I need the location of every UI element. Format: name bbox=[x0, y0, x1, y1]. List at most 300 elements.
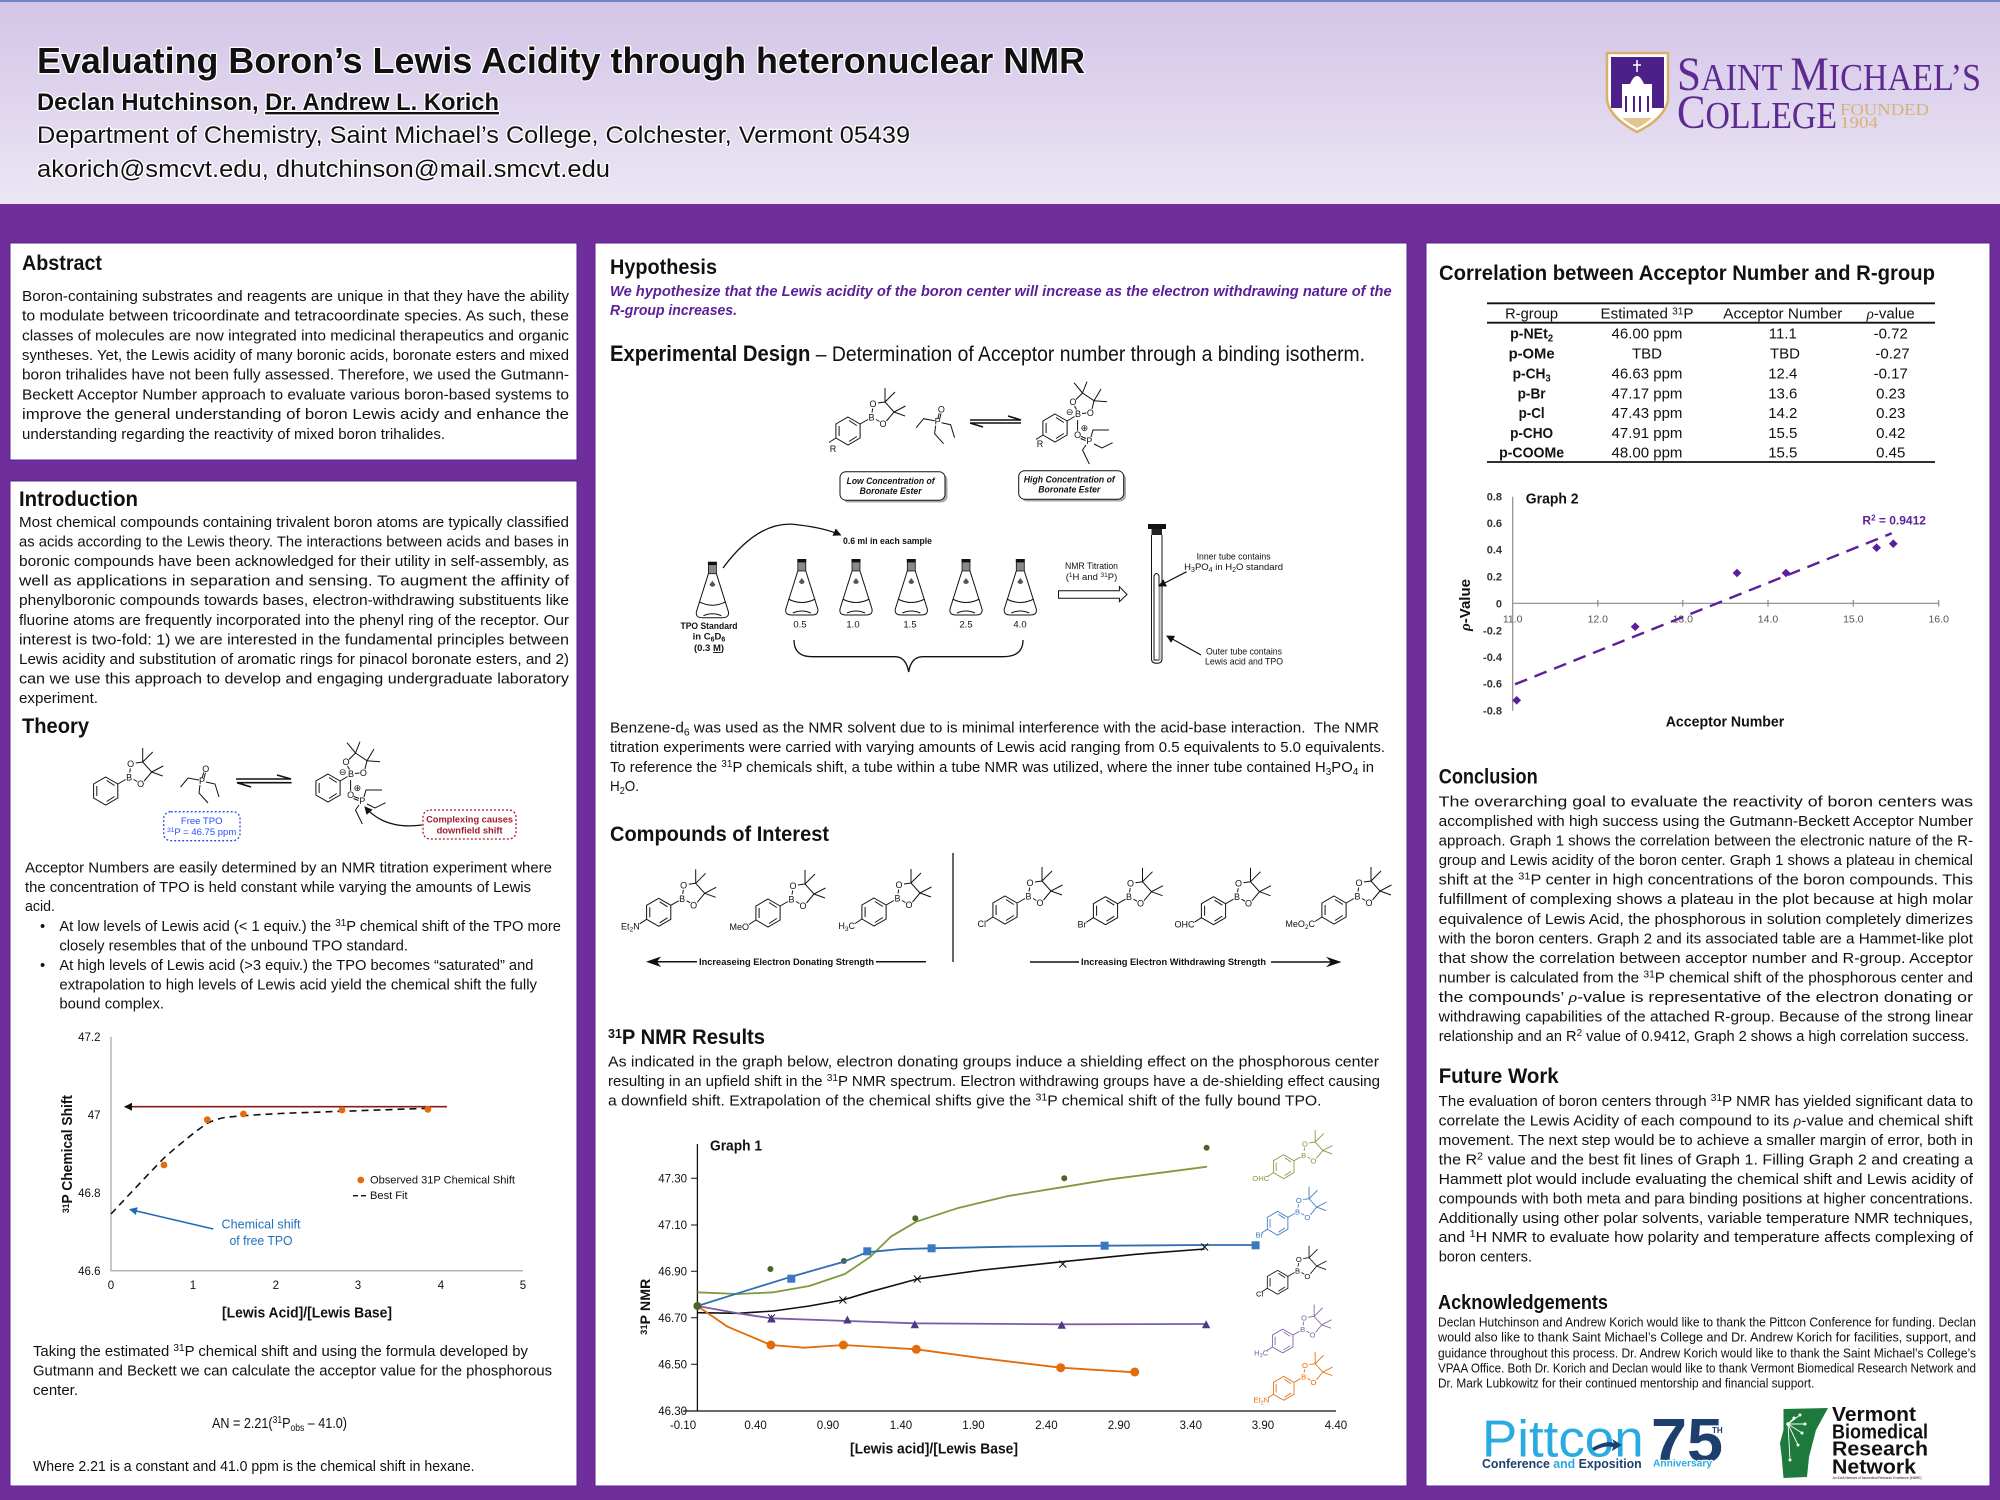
table: acceptor numbers: 47.43 ppm bbox=[1612, 405, 1682, 422]
molecule: complex bbox=[316, 742, 386, 824]
molecule: complex bbox=[1036, 382, 1113, 464]
table: acceptor numbers: 46.63 ppm bbox=[1612, 365, 1682, 382]
introduction text: experiment. bbox=[19, 691, 98, 707]
table: acceptor numbers: Estimated bbox=[1600, 305, 1667, 322]
table: acceptor numbers: 13.6 bbox=[1768, 385, 1797, 402]
data points bbox=[161, 1106, 431, 1168]
panel: abstract bbox=[10, 243, 577, 460]
conclusion text: withdrawing capabilities of the attached R-group. Because of the strong linear bbox=[1438, 1010, 1973, 1026]
molecule: TPO: P bbox=[199, 776, 205, 786]
scheme: binding equilibrium bbox=[829, 382, 1126, 502]
formula: AN = 2.21( bbox=[212, 1416, 283, 1432]
label: outer tube: Lewis acid and TPO bbox=[1205, 657, 1283, 668]
logo: Pittcon: Anniversary bbox=[1653, 1458, 1712, 1470]
series: Cl bbox=[697, 1244, 1208, 1321]
label: inner tube: H bbox=[1184, 562, 1191, 573]
hypothesis statement: R-group increases. bbox=[610, 303, 737, 319]
table: acceptor numbers: 47.17 ppm bbox=[1612, 385, 1682, 402]
compound: OMe: O bbox=[799, 901, 807, 911]
heading: theory: Theory bbox=[22, 715, 89, 738]
label: TPO standard: 6 bbox=[721, 636, 725, 643]
molecule: TPO: O bbox=[202, 764, 209, 774]
text: solvent and method: 6 bbox=[684, 728, 690, 738]
compound: Br: B bbox=[1126, 892, 1132, 902]
table: acceptor numbers: 0.42 bbox=[1876, 425, 1905, 442]
table: acceptor numbers: 14.2 bbox=[1768, 405, 1797, 422]
conclusion text: number is calculated from the bbox=[1439, 970, 1633, 986]
callout: free TPO: Free TPO bbox=[181, 816, 222, 827]
introduction text: fluorine atoms are frequently incorporated into the phenyl ring of the receptor. Our bbox=[19, 613, 569, 629]
x axis ticks: 1.90 bbox=[962, 1420, 985, 1432]
text: results: 31 bbox=[827, 1073, 838, 1084]
future work text: Additionally using other polar solvents, variable temperature NMR techniques, bbox=[1439, 1211, 1973, 1227]
label: NMR titration: 31 bbox=[1101, 572, 1108, 579]
future work text: 2 bbox=[1477, 1151, 1484, 1162]
text: formula explanation: 31 bbox=[173, 1343, 185, 1354]
future work text: boron centers. bbox=[1439, 1250, 1532, 1266]
axis label: x: [Lewis acid]/[Lewis Base] bbox=[850, 1440, 1018, 1457]
y axis ticks: 47.10 bbox=[658, 1220, 687, 1232]
table: acceptor numbers: TBD bbox=[1632, 345, 1662, 362]
text: solvent and method: P chemicals shift, a tube within a tube NMR was utilized, where the inner tube contained H bbox=[732, 760, 1326, 776]
theory text: 31 bbox=[335, 918, 347, 929]
label: low concentration: Boronate Ester bbox=[860, 486, 923, 497]
compound: Br: O bbox=[1127, 879, 1134, 889]
data points bbox=[1512, 539, 1898, 705]
logo: Vermont Biomedical Research Network: An IDeA Network of Biomedical Research Excellence (INBRE) bbox=[1833, 1476, 1922, 1480]
y axis ticks: -0.4 bbox=[1483, 652, 1503, 664]
compound: CO2Me: O bbox=[1355, 878, 1363, 888]
future work text: 31 bbox=[1711, 1093, 1723, 1104]
label: high concentration bbox=[1019, 471, 1126, 502]
molecule: complex: ⊕ bbox=[1081, 423, 1088, 433]
table: acceptor numbers: p-Cl bbox=[1519, 405, 1545, 422]
callout: free TPO bbox=[164, 812, 240, 841]
future work text: value and the best fit lines of Graph 1. Filling Graph 2 and creating a bbox=[1483, 1152, 1974, 1168]
conclusion text: The overarching goal to evaluate the reactivity of boron centers was bbox=[1439, 794, 1973, 810]
table: acceptor numbers: 47.91 ppm bbox=[1612, 425, 1682, 442]
text: solvent and method: 2 bbox=[620, 786, 625, 797]
compound: CO2Me: B bbox=[1354, 892, 1361, 902]
title: Evaluating Boron’s Lewis Acidity through heteronuclear NMR bbox=[37, 40, 1085, 81]
y axis ticks: 0.2 bbox=[1487, 572, 1502, 584]
table: acceptor numbers: ρ-value bbox=[1866, 305, 1915, 322]
logo: Vermont Biomedical Research Network: Research bbox=[1832, 1439, 1928, 1461]
y axis ticks: 46.90 bbox=[658, 1266, 687, 1278]
logo: Pittcon bbox=[1482, 1407, 1723, 1476]
table: acceptor numbers: 3 bbox=[1545, 373, 1551, 384]
labels: equivalents: 1.0 bbox=[846, 619, 860, 630]
text: solvent and method: O. bbox=[625, 779, 639, 795]
x axis ticks: 11.0 bbox=[1503, 613, 1523, 625]
compound: Et2N: O bbox=[680, 880, 687, 890]
molecule: TPO bbox=[916, 405, 955, 444]
series: Br bbox=[697, 1241, 1260, 1306]
logo: Saint Michael's College: FOUNDED bbox=[1840, 100, 1929, 119]
abstract text: to modulate between tricoordinate and tetracoordinate species. As such, these bbox=[22, 309, 569, 325]
compound: CH3: H bbox=[838, 921, 845, 931]
abstract text: improve the general understanding of boron Lewis acidy and enhance the bbox=[22, 407, 569, 423]
conclusion text: P chemical shift of the phosphorous center and bbox=[1655, 970, 1973, 986]
theory scheme: equilibrium bbox=[94, 742, 516, 841]
y axis ticks: 0.8 bbox=[1487, 491, 1502, 503]
series: CH3 bbox=[697, 1306, 1210, 1329]
molecule key: Et2N: O bbox=[1310, 1378, 1316, 1387]
text: solvent and method: was used as the NMR solvent due to is minimal interference with the acid-base interaction. The NMR bbox=[690, 720, 1379, 736]
table: acceptor numbers: 31 bbox=[1672, 306, 1684, 317]
logo: Saint Michael's College: 1904 bbox=[1840, 113, 1879, 132]
abstract text: Beckett Acceptor Number approach to evaluate various boron-based systems to bbox=[22, 387, 569, 403]
chart: 31P chemical shift titration: 2 bbox=[273, 1280, 279, 1292]
compounds of interest row bbox=[621, 853, 1392, 968]
compound: Cl: O bbox=[1036, 898, 1044, 908]
formula: obs bbox=[291, 1423, 304, 1434]
molecule: complex: ⊖ bbox=[339, 767, 346, 777]
labels: equivalents: 2.5 bbox=[959, 619, 973, 630]
acknowledgements text: Declan Hutchinson and Andrew Korich would like to thank the Pittcon Conference for funding. Declan bbox=[1438, 1316, 1976, 1330]
introduction text: boronic compounds have been acknowledged for their utility in self-assembly, as bbox=[19, 554, 569, 570]
future work text: P NMR has yielded significant data to bbox=[1722, 1094, 1973, 1110]
label: high concentration: Boronate Ester bbox=[1038, 485, 1101, 496]
molecule key: H3C: O bbox=[1301, 1314, 1307, 1323]
theory text: At high levels of Lewis acid (>3 equiv.) the TPO becomes “saturated” and bbox=[59, 958, 533, 974]
labels: equivalents bbox=[793, 619, 1027, 630]
r squared label: = 0.9412 bbox=[1876, 513, 1926, 527]
label: NMR titration: 1 bbox=[1069, 572, 1073, 579]
brace bbox=[794, 640, 1023, 672]
label: inner tube: 3 bbox=[1191, 567, 1195, 574]
arrow: transfer bbox=[723, 524, 840, 568]
heading: future work: Future Work bbox=[1439, 1065, 1559, 1088]
molecule: phenyl boronate: B bbox=[126, 772, 132, 782]
conclusion text: that show the correlation between acceptor number and R-group. Acceptor bbox=[1439, 951, 1973, 967]
label: low concentration: Low Concentration of bbox=[847, 476, 935, 487]
y axis ticks: 46.70 bbox=[658, 1313, 687, 1325]
conclusion text: fulfillment of complexing shows a plateau in the plot because at high molar bbox=[1439, 892, 1973, 908]
axis label: x: Acceptor Number bbox=[1666, 714, 1784, 731]
trendline bbox=[1515, 533, 1892, 684]
series: Et2N bbox=[697, 1306, 1139, 1376]
conclusion text: with the boron centers. Graph 2 and its associated table are a Hammet-like plot bbox=[1438, 931, 1973, 947]
molecule key: Et2N: B bbox=[1301, 1372, 1306, 1381]
future work text bbox=[1439, 1093, 1974, 1266]
compound: CHO: O bbox=[1245, 899, 1252, 909]
future work text: compounds with both meta and para binding positions at higher concentrations. bbox=[1439, 1191, 1973, 1207]
x axis ticks: 1.40 bbox=[890, 1420, 912, 1432]
molecule: complex: O bbox=[1087, 408, 1094, 418]
table: acceptor numbers: p-CHO bbox=[1510, 425, 1553, 442]
theory text: At low levels of Lewis acid (< 1 equiv.) the bbox=[59, 919, 333, 935]
arrow: donating strength: Increaseing Electron Donating Strength bbox=[699, 957, 874, 968]
heading: 31P NMR results: 31 bbox=[608, 1026, 622, 1041]
logo: Saint Michael's College bbox=[1607, 48, 1981, 139]
chart: graph 1 bbox=[637, 1130, 1347, 1457]
label: NMR titration bbox=[1065, 561, 1118, 583]
x axis ticks bbox=[1503, 613, 1949, 625]
introduction text: can we use this approach to develop and engaging undergraduate laboratory bbox=[19, 672, 570, 688]
x axis ticks: 0.90 bbox=[817, 1420, 839, 1432]
table: acceptor numbers: P bbox=[1683, 305, 1694, 322]
conclusion text: P center in high concentrations of the boron compounds. This bbox=[1531, 873, 1973, 889]
molecule: phenyl boronate: O bbox=[137, 779, 144, 789]
conclusion text: shift at the bbox=[1439, 873, 1507, 889]
text: results: P NMR spectrum. Electron withdrawing groups have a de-shielding effect causing bbox=[838, 1074, 1380, 1090]
x axis ticks bbox=[670, 1420, 1347, 1432]
introduction text: well as applications in separation and sensing. To augment the affinity of bbox=[18, 574, 570, 590]
panel: hypothesis, design, results bbox=[595, 243, 1407, 1486]
x axis ticks: 14.0 bbox=[1758, 613, 1778, 625]
future work text: Hammett plot would include evaluating the chemical shift and Lewis acidity of bbox=[1439, 1172, 1974, 1188]
conclusion text: group and Lewis acidity of the boron center. Graph 1 shows a plateau in chemical bbox=[1439, 853, 1973, 869]
theory text: closely resembles that of the unbound TPO standard. bbox=[59, 939, 408, 955]
x axis ticks: 3.40 bbox=[1180, 1420, 1202, 1432]
y axis ticks: -0.8 bbox=[1483, 705, 1502, 717]
axis label: y: P NMR bbox=[637, 1279, 653, 1324]
authors: Declan Hutchinson, Dr. Andrew L. Korich bbox=[37, 89, 499, 116]
logo: Pittcon: Pittcon bbox=[1482, 1411, 1644, 1469]
x axis ticks: 2.40 bbox=[1035, 1420, 1058, 1432]
molecule: boronate ester bbox=[829, 388, 906, 454]
introduction text: Most chemical compounds containing trivalent boron atoms are typically classified bbox=[19, 515, 569, 531]
future work text: and bbox=[1439, 1230, 1463, 1246]
compound: Cl: B bbox=[1025, 892, 1032, 902]
future work text: 1 bbox=[1470, 1229, 1476, 1240]
compound: CO2Me: O bbox=[1365, 898, 1373, 908]
abstract text: understanding regarding the reactivity of mixed boron trihalides. bbox=[22, 427, 445, 443]
chart: 31P chemical shift titration: 4 bbox=[438, 1280, 445, 1292]
y axis ticks: 0 bbox=[1496, 598, 1502, 610]
logo: Saint Michael's College: SAINT MICHAEL’S bbox=[1677, 48, 1981, 101]
molecule key: Cl: B bbox=[1295, 1266, 1300, 1275]
molecule: complex: ⊕ bbox=[354, 783, 361, 793]
text: results bbox=[608, 1055, 1380, 1110]
table: acceptor numbers: 0.23 bbox=[1876, 405, 1905, 422]
chart: 31P chemical shift titration: 47.2 bbox=[78, 1032, 100, 1044]
molecule key: Br: O bbox=[1296, 1196, 1302, 1205]
compound: CH3: O bbox=[895, 880, 903, 890]
annotation: free TPO: of free TPO bbox=[230, 1233, 292, 1248]
theory text: bound complex. bbox=[59, 997, 164, 1013]
text: results: 31 bbox=[1035, 1093, 1048, 1104]
molecule: complex: O bbox=[1069, 397, 1077, 407]
molecule key: CHO: OHC bbox=[1252, 1174, 1270, 1183]
molecule: TPO: P bbox=[935, 417, 941, 427]
theory text: extrapolation to high levels of Lewis acid yield the chemical shift the fully bbox=[59, 977, 538, 993]
compound: Et2N: N bbox=[633, 921, 640, 931]
label: TPO standard: 6 bbox=[711, 636, 715, 643]
legend: Observed 31P Chemical Shift bbox=[370, 1175, 515, 1187]
hypothesis statement: We hypothesize that the Lewis acidity of the boron center will increase as the electron withdrawing nature of the bbox=[610, 284, 1392, 300]
y axis ticks: 47.30 bbox=[658, 1174, 687, 1186]
molecule: boronate ester: O bbox=[879, 419, 887, 429]
heading: compounds of interest: Compounds of Interest bbox=[610, 823, 829, 846]
molecule key: H3C bbox=[1254, 1304, 1332, 1359]
chart: 31P chemical shift titration bbox=[60, 1032, 526, 1322]
label: inner tube: PO bbox=[1195, 562, 1209, 573]
compound: Et2N: B bbox=[679, 894, 685, 904]
text: results: P chemical shift of the fully bound TPO. bbox=[1047, 1094, 1322, 1110]
series: CHO bbox=[697, 1145, 1210, 1294]
acknowledgements text: would also like to thank Saint Michael’s College and Dr. Andrew Korich for facilities, support, and bbox=[1437, 1331, 1976, 1345]
molecule: complex: B bbox=[348, 769, 354, 779]
formula: – 41.0) bbox=[304, 1416, 347, 1432]
label: inner tube: 4 bbox=[1209, 567, 1213, 574]
molecule: boronate ester: R bbox=[830, 444, 837, 454]
abstract text: classes of molecules are now integrated into medicinal therapeutics and organic bbox=[22, 328, 570, 344]
compound: Et2N: 2 bbox=[630, 926, 634, 933]
conclusion text: 2 bbox=[1577, 1028, 1583, 1039]
table: acceptor numbers: 0.23 bbox=[1876, 385, 1905, 402]
compound: CHO: OHC bbox=[1174, 920, 1195, 930]
label: NMR titration: ( bbox=[1066, 572, 1069, 583]
compound: CHO: B bbox=[1234, 892, 1240, 902]
compound: CH3: C bbox=[848, 921, 856, 931]
abstract text: syntheses. Yet, the Lewis acidity of many boronic acids, boronate esters and mixed bbox=[22, 348, 569, 364]
chart: 31P chemical shift titration: 3 bbox=[355, 1280, 361, 1292]
conclusion text: value of 0.9412, Graph 2 shows a high correlation success. bbox=[1582, 1029, 1969, 1045]
axis label: x: [Lewis Acid]/[Lewis Base] bbox=[222, 1305, 392, 1322]
acknowledgements text bbox=[1437, 1316, 1976, 1391]
molecule key: CHO: O bbox=[1302, 1139, 1308, 1148]
theory text: • bbox=[40, 919, 45, 935]
table: acceptor numbers: -0.72 bbox=[1874, 325, 1908, 342]
molecule key: Br: Br bbox=[1256, 1231, 1264, 1240]
label: TPO standard: D bbox=[715, 631, 722, 642]
table: acceptor numbers: 0.45 bbox=[1876, 445, 1905, 462]
text: hexane note: Where 2.21 is a constant and 41.0 ppm is the chemical shift in hexane. bbox=[33, 1459, 474, 1475]
labels: equivalents: 1.5 bbox=[903, 619, 917, 630]
future work text: The evaluation of boron centers through bbox=[1439, 1094, 1701, 1110]
conclusion text: 31 bbox=[1518, 872, 1531, 883]
formula: 31 bbox=[273, 1415, 282, 1426]
x axis ticks: 13.0 bbox=[1673, 613, 1693, 625]
future work text: H NMR to evaluate how polarity and temperature affects complexing of bbox=[1476, 1230, 1974, 1246]
start point bbox=[693, 1302, 701, 1310]
logo: Pittcon: 75 bbox=[1651, 1407, 1723, 1476]
molecule key: H3C: 3 bbox=[1260, 1353, 1263, 1359]
heading: 31P NMR results: P NMR Results bbox=[622, 1026, 765, 1049]
callout: free TPO: 31 bbox=[167, 827, 175, 834]
abstract text: boron trihalides have not been fully assessed. Therefore, we used the Gutmann- bbox=[22, 368, 569, 384]
heading: acknowledgements: Acknowledgements bbox=[1438, 1292, 1608, 1314]
compound: CO2Me: C bbox=[1308, 919, 1316, 929]
y axis ticks: -0.2 bbox=[1483, 625, 1502, 637]
heading: hypothesis: Hypothesis bbox=[610, 256, 717, 279]
conclusion text: approach. Graph 1 shows the correlation between the electronic nature of the R- bbox=[1439, 834, 1973, 850]
compound: Br: Br bbox=[1078, 920, 1087, 930]
molecule key: Br: B bbox=[1295, 1207, 1300, 1216]
arrow: withdrawing strength: Increasing Electron Withdrawing Strength bbox=[1081, 957, 1266, 968]
heading: conclusion: Conclusion bbox=[1439, 766, 1538, 788]
chart: 31P chemical shift titration: 46.6 bbox=[78, 1266, 100, 1278]
header banner bbox=[0, 0, 2000, 204]
label: inner tube: in H bbox=[1213, 562, 1232, 573]
text: results: a downfield shift. Extrapolation of the chemical shifts give the bbox=[608, 1094, 1007, 1110]
table: acceptor numbers: 15.5 bbox=[1768, 445, 1797, 462]
y axis ticks: 0.4 bbox=[1487, 545, 1503, 557]
acknowledgements text: guidance throughout this process. Dr. Andrew Korich would like to thank the Saint Michael’s College’s bbox=[1438, 1346, 1976, 1360]
table: acceptor numbers: p-COOMe bbox=[1499, 445, 1564, 462]
label: low concentration bbox=[840, 472, 948, 502]
theory text: Acceptor Numbers are easily determined by an NMR titration experiment where bbox=[25, 860, 552, 876]
compound: CH3 bbox=[838, 869, 932, 933]
heading: experimental design: Experimental Design – Determination of Acceptor number through a binding isotherm. bbox=[610, 341, 1365, 366]
compound: CHO: O bbox=[1235, 879, 1242, 889]
text: formula explanation: center. bbox=[33, 1383, 78, 1399]
compound: CH3: B bbox=[894, 894, 901, 904]
panel: correlation, conclusion, future work, acknowledgements bbox=[1426, 243, 1990, 1486]
theory text: the concentration of TPO is held constant while varying the amounts of Lewis bbox=[25, 880, 531, 896]
molecule: complex: B bbox=[1075, 409, 1081, 419]
conclusion text: equivalence of Lewis Acid, the phosphorous in solution completely dimerizes bbox=[1439, 912, 1973, 928]
chart: 31P chemical shift titration: 5 bbox=[520, 1280, 526, 1292]
x axis ticks: 4.40 bbox=[1325, 1420, 1347, 1432]
label: outer tube bbox=[1205, 646, 1283, 668]
annotation: free TPO bbox=[222, 1216, 301, 1248]
molecule key: CHO: O bbox=[1310, 1156, 1316, 1165]
label: high concentration: High Concentration of bbox=[1024, 475, 1116, 486]
label: NMR titration: P) bbox=[1108, 572, 1117, 583]
compound: Cl bbox=[978, 867, 1062, 929]
table: acceptor numbers: 48.00 ppm bbox=[1612, 445, 1682, 462]
future work text: the R bbox=[1439, 1152, 1474, 1168]
text: solvent and method: To reference the bbox=[610, 760, 717, 776]
compound: CH3: O bbox=[905, 900, 913, 910]
table: acceptor numbers: 2 bbox=[1548, 333, 1554, 344]
text: solvent and method: in bbox=[1358, 760, 1374, 776]
molecule key: Cl: O bbox=[1304, 1272, 1310, 1281]
text: results: As indicated in the graph below, electron donating groups induce a shielding effect on the phosphorous center bbox=[608, 1055, 1379, 1071]
compound: CO2Me: MeO bbox=[1285, 919, 1305, 929]
label: volume: 0.6 ml in each sample bbox=[843, 536, 932, 547]
molecule: TPO: O bbox=[938, 405, 945, 415]
y axis ticks: 0.6 bbox=[1487, 518, 1502, 530]
molecule: complex: P bbox=[359, 796, 365, 806]
label: inner tube: 2 bbox=[1232, 567, 1236, 574]
molecule: boronate ester: O bbox=[869, 399, 877, 409]
table: acceptor numbers: p-Br bbox=[1518, 385, 1546, 402]
label: TPO standard bbox=[680, 621, 738, 654]
molecule key: Br bbox=[1256, 1187, 1326, 1240]
text: solvent and method: titration experiments were carried with varying amounts of Lewis acid ranging from 0.5 equivalents to 5.0 equivalents. bbox=[610, 740, 1385, 756]
table: acceptor numbers: 11.1 bbox=[1769, 325, 1797, 342]
compound: OMe bbox=[729, 870, 826, 932]
molecule: boronate ester: B bbox=[868, 412, 875, 422]
conclusion text: accomplished with high success using the Gutmann-Beckett Acceptor Number bbox=[1439, 814, 1973, 830]
y axis ticks bbox=[1483, 491, 1503, 717]
molecule: complex: R bbox=[1037, 439, 1044, 449]
molecule key: Et2N bbox=[1253, 1352, 1333, 1406]
y axis ticks: 46.50 bbox=[658, 1360, 687, 1372]
molecule key: H3C: O bbox=[1309, 1331, 1315, 1340]
saturation arrow bbox=[125, 1106, 447, 1108]
text: formula explanation bbox=[33, 1343, 552, 1399]
chart: 31P chemical shift titration: 46.8 bbox=[78, 1188, 100, 1200]
callout: complexing: Complexing causes bbox=[426, 815, 513, 826]
molecule key: Et2N: O bbox=[1302, 1361, 1308, 1370]
text: solvent and method: Benzene-d bbox=[610, 720, 682, 736]
abstract text: Boron-containing substrates and reagents are unique in that they have the ability bbox=[22, 289, 570, 305]
conclusion text: the compounds’ ρ-value is representative of the electron donating or bbox=[1439, 990, 1973, 1006]
arrow: free TPO bbox=[130, 1210, 213, 1229]
flask: TPO standard bbox=[696, 562, 729, 618]
logo: Saint Michael's College: COLLEGE bbox=[1677, 86, 1837, 139]
chart: graph 2 bbox=[1457, 491, 1949, 731]
molecule key: Cl: Cl bbox=[1256, 1290, 1263, 1299]
compound: Cl: O bbox=[1026, 878, 1034, 888]
axis label: y: P Chemical Shift bbox=[60, 1095, 76, 1203]
label: inner tube: O standard bbox=[1236, 562, 1283, 573]
